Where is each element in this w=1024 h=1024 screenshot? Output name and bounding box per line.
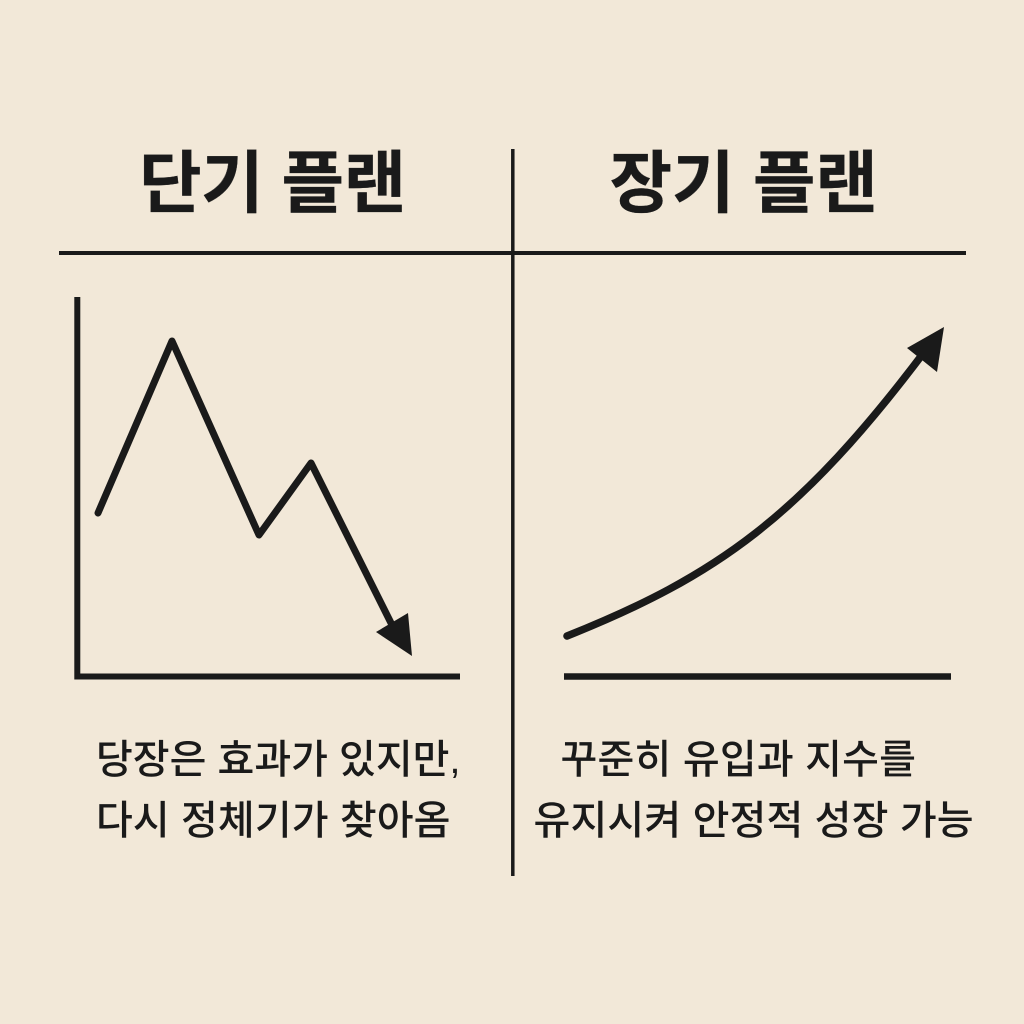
arrow: downward head	[376, 613, 412, 656]
chart: short-term decline	[77, 297, 460, 676]
heading: long-term plan: 장기 플랜	[610, 146, 878, 222]
line: zigzag falling trend	[98, 341, 392, 625]
text: short-term description: 당장은 효과가 있지만,	[96, 738, 461, 782]
text: short-term description	[96, 738, 461, 843]
baseline	[564, 673, 951, 680]
chart axes	[77, 297, 460, 676]
text: short-term description: 다시 정체기가 찾아옴	[96, 799, 451, 843]
curve: rising trend	[567, 351, 925, 636]
chart: long-term growth	[564, 327, 951, 676]
text: long-term description: 꾸준히 유입과 지수를	[560, 738, 916, 782]
arrow: upward head	[907, 327, 944, 372]
text: long-term description: 유지시켜 안정적 성장 가능	[534, 799, 974, 843]
heading: short-term plan: 단기 플랜	[139, 146, 406, 222]
text: long-term description	[534, 738, 974, 843]
